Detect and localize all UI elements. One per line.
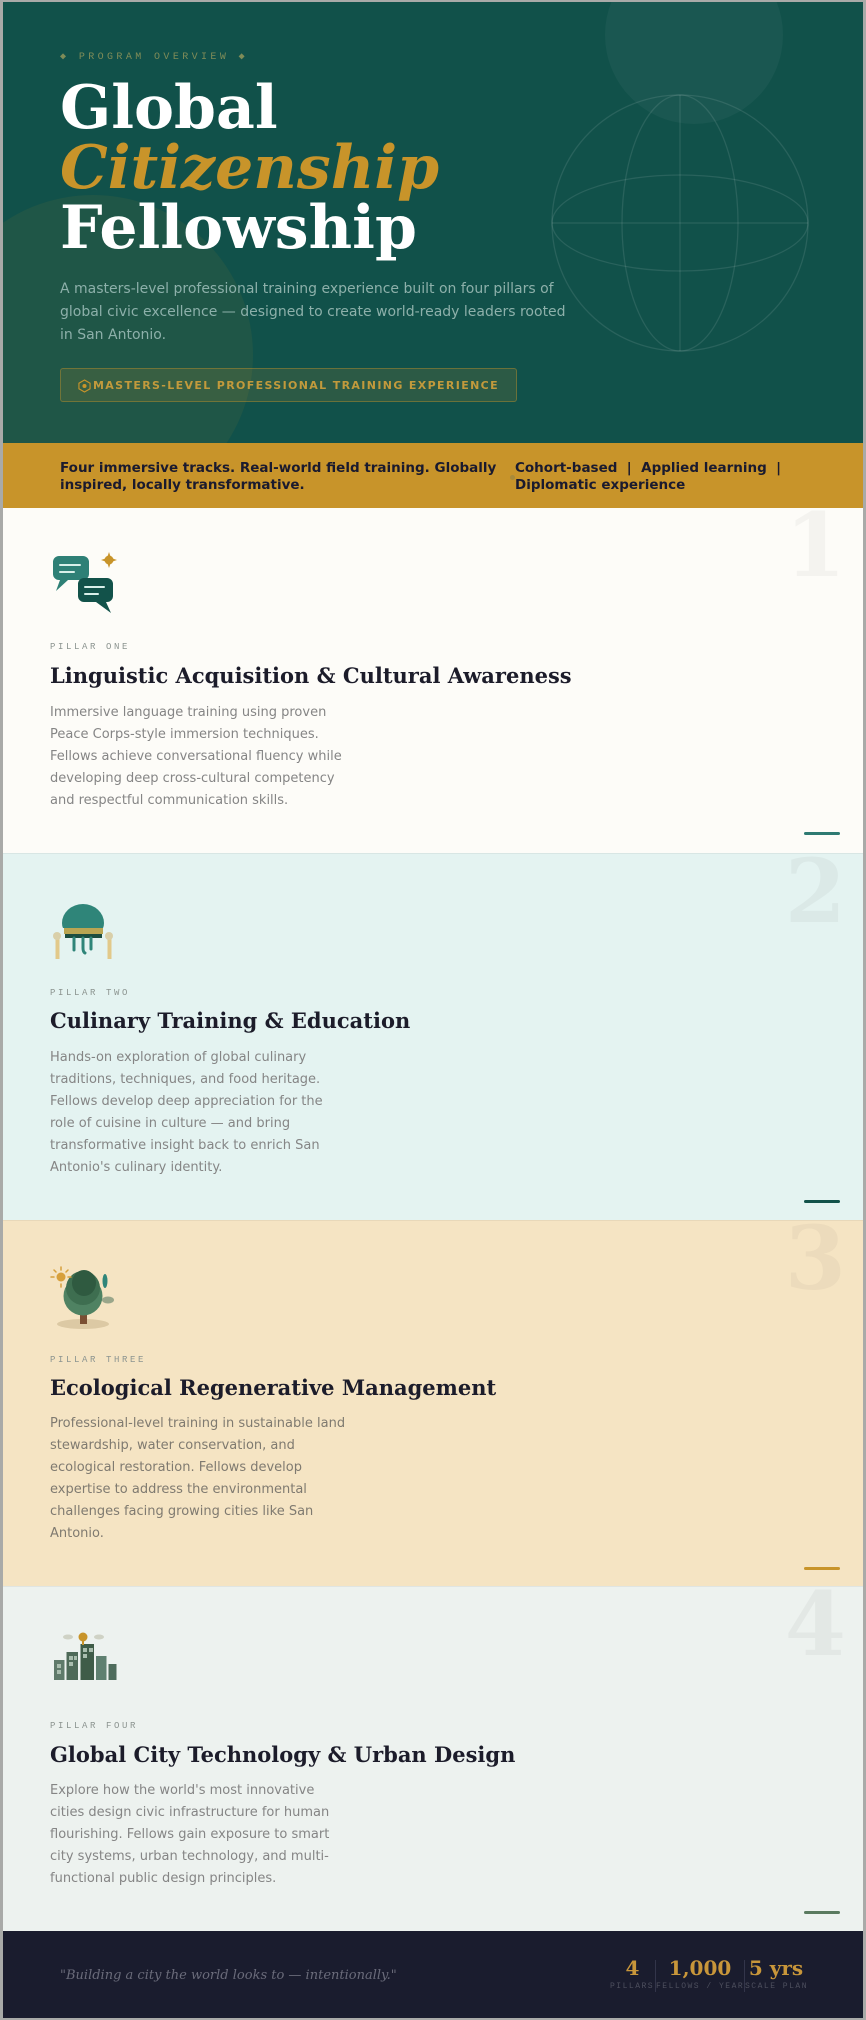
summary text right: Cohort-based | Applied learning | [515,460,781,476]
pillar title: Ecological Regenerative Management [50,1375,496,1400]
pillar description: ecological restoration. Fellows develop [50,1460,302,1475]
accent bar [804,832,840,835]
pillar description [50,705,342,808]
badge [60,368,517,402]
pillar description: Immersive language training using proven [50,705,326,720]
pillar description: Hands-on exploration of global culinary [50,1050,306,1065]
badge text: MASTERS-LEVEL PROFESSIONAL TRAINING EXPERIENCE [93,379,499,392]
pillar description: Peace Corps-style immersion techniques. [50,727,319,742]
pillar description: expertise to address the environmental [50,1482,307,1497]
panel: pillar four [3,1586,863,1931]
pillar description: Professional-level training in sustainable land [50,1416,345,1431]
pillar description: cities design civic infrastructure for human [50,1805,329,1820]
pillar description: Antonio. [50,1526,104,1541]
title [60,73,439,263]
panel: footer [3,1931,863,2018]
icon: hexagon badge mark [78,379,91,392]
pillar description: Fellows develop deep appreciation for the [50,1094,323,1109]
hero description: A masters-level professional training experience built on four pillars of [60,281,554,297]
stat caption: FELLOWS / YEAR [656,1982,744,1991]
pillar description [50,1050,323,1175]
pillar description [50,1783,330,1886]
stat caption: SCALE PLAN [745,1982,808,1991]
pillar description: and respectful communication skills. [50,793,288,808]
panel: hero [3,2,863,443]
separator dot [510,475,515,480]
stat: scale plan [744,1960,807,1992]
pillar description: Antonio's culinary identity. [50,1160,222,1175]
pillar description: challenges facing growing cities like San [50,1504,313,1519]
pillar description: flourishing. Fellows gain exposure to smart [50,1827,329,1842]
summary text left: Four immersive tracks. Real-world field training. Globally [60,460,496,476]
pillar description: city systems, urban technology, and multi- [50,1849,329,1864]
hero description: in San Antonio. [60,327,166,343]
icon: tree and sun [50,1266,114,1329]
pillar description: Fellows achieve conversational fluency while [50,749,342,764]
icon: speech bubbles [53,552,117,613]
stat: fellows per year [655,1960,744,1992]
pillar title: Linguistic Acquisition & Cultural Awareness [50,663,572,688]
panel: pillar one [3,508,863,853]
eyebrow label: ◆ PROGRAM OVERVIEW ◆ [60,52,248,63]
icon: cloche and utensils [53,904,113,959]
pillar description: Explore how the world's most innovative [50,1783,314,1798]
stat value: 5 yrs [749,1956,803,1980]
title: Citizenship [60,133,439,203]
title: Global [60,73,278,143]
pillar description [50,1416,345,1541]
pillar description: functional public design principles. [50,1871,276,1886]
title: Fellowship [60,193,417,263]
pillar description: stewardship, water conservation, and [50,1438,295,1453]
decorative globe and circles [3,2,809,443]
summary text left [60,460,496,493]
pillar label: PILLAR ONE [50,642,130,652]
stat caption: PILLARS [610,1982,654,1991]
footer quote: "Building a city the world looks to — intentionally." [60,1968,397,1983]
pillar description: developing deep cross-cultural competency [50,771,335,786]
pillar description: role of cuisine in culture — and bring [50,1116,290,1131]
stat value: 4 [626,1956,639,1980]
pillar label: PILLAR THREE [50,1355,146,1365]
pillar description: traditions, techniques, and food heritage. [50,1072,320,1087]
hero description: global civic excellence — designed to create world-ready leaders rooted [60,304,566,320]
stat value: 1,000 [669,1956,731,1980]
pillar label: PILLAR TWO [50,988,130,998]
pillar title: Global City Technology & Urban Design [50,1742,515,1767]
panel: pillar three [3,1220,863,1587]
accent bar [804,1911,840,1914]
pillar description: transformative insight back to enrich San [50,1138,320,1153]
summary text right [515,460,781,493]
panel: pillar two [3,853,863,1220]
hero description [60,281,566,343]
accent bar [804,1567,840,1570]
panel: gold summary band [3,443,863,508]
icon: city skyline [54,1632,116,1680]
pillar title: Culinary Training & Education [50,1008,410,1033]
pillar label: PILLAR FOUR [50,1721,138,1731]
summary text right: Diplomatic experience [515,477,685,493]
accent bar [804,1200,840,1203]
summary text left: inspired, locally transformative. [60,477,305,493]
stat: pillars [610,1956,654,1991]
